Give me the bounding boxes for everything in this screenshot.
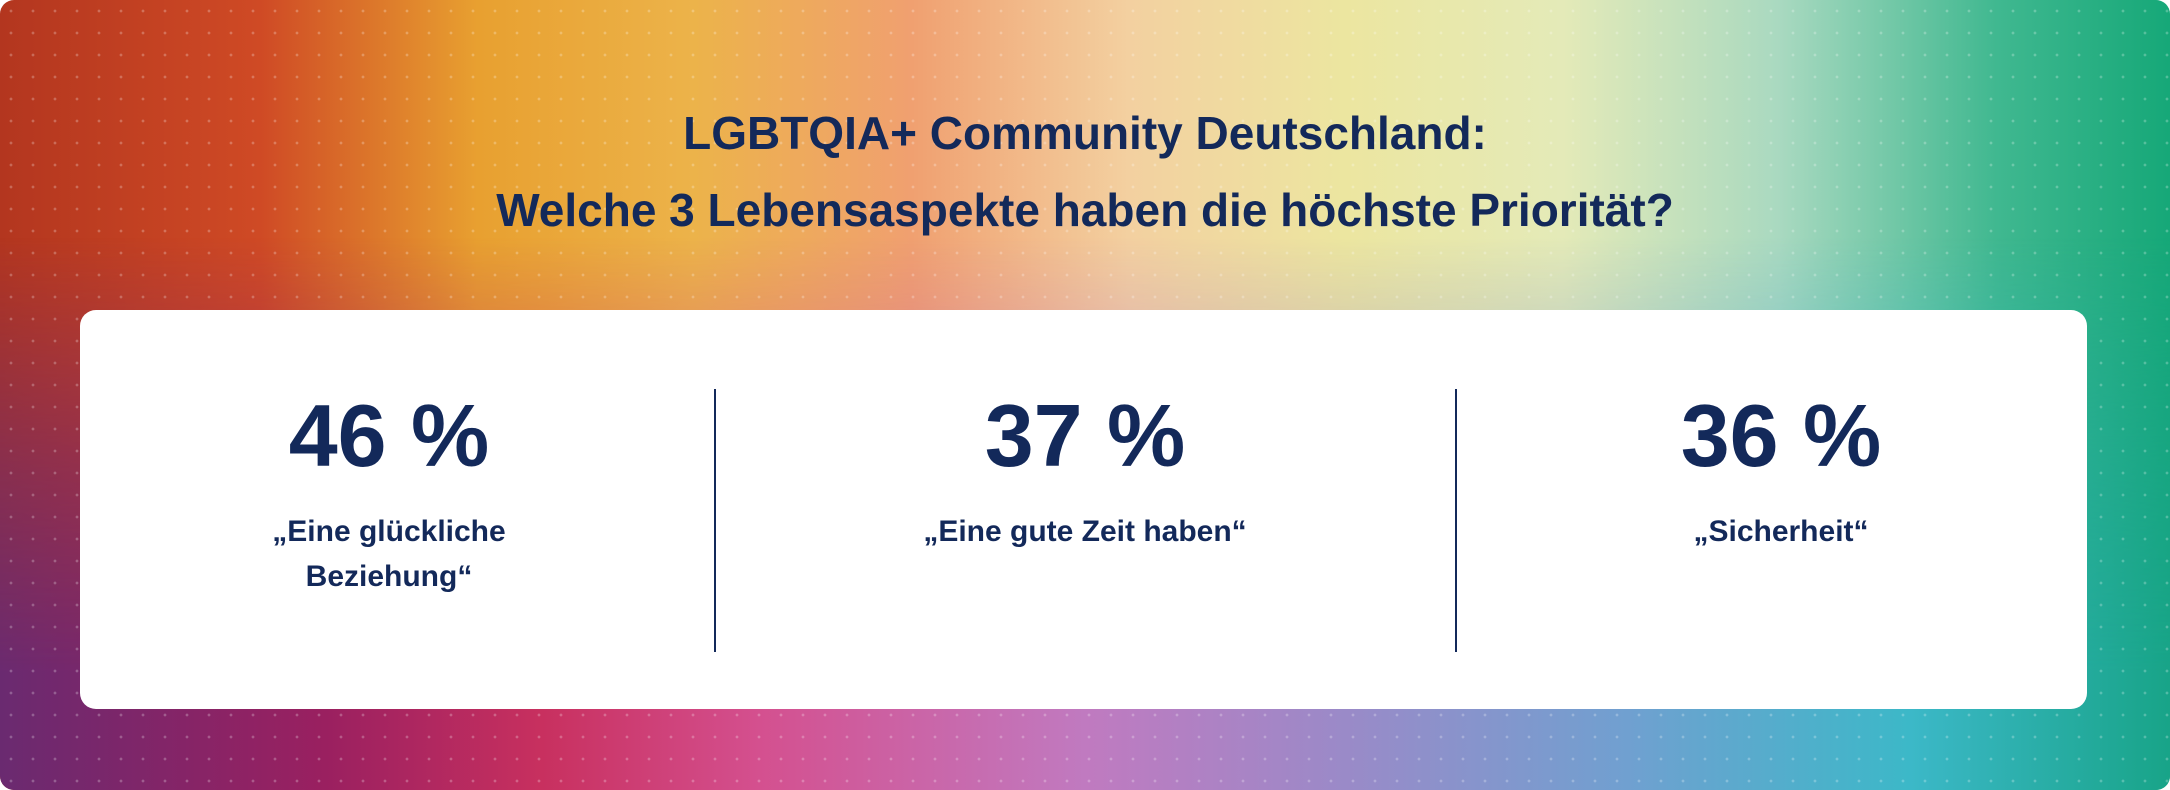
stat: 46 %: „Eine glückliche (272, 515, 506, 548)
stat: 46 % (272, 386, 506, 593)
stat: 36 %: „Sicherheit“ (1693, 515, 1869, 548)
title: Welche 3 Lebensaspekte haben die höchste Priorität? (496, 184, 1674, 236)
stat: 36 % (1681, 386, 1881, 548)
stat: 46 %: 46 % (289, 386, 489, 485)
stat: 37 %: 37 % (985, 386, 1185, 485)
title: LGBTQIA+ Community Deutschland: (683, 107, 1487, 159)
stat: 37 %: „Eine gute Zeit haben“ (923, 515, 1247, 548)
stat: 37 % (923, 386, 1247, 548)
stat: 46 %: Beziehung“ (306, 560, 472, 593)
title (496, 107, 1674, 236)
panel: results card (80, 310, 2087, 709)
stat: 36 %: 36 % (1681, 386, 1881, 485)
